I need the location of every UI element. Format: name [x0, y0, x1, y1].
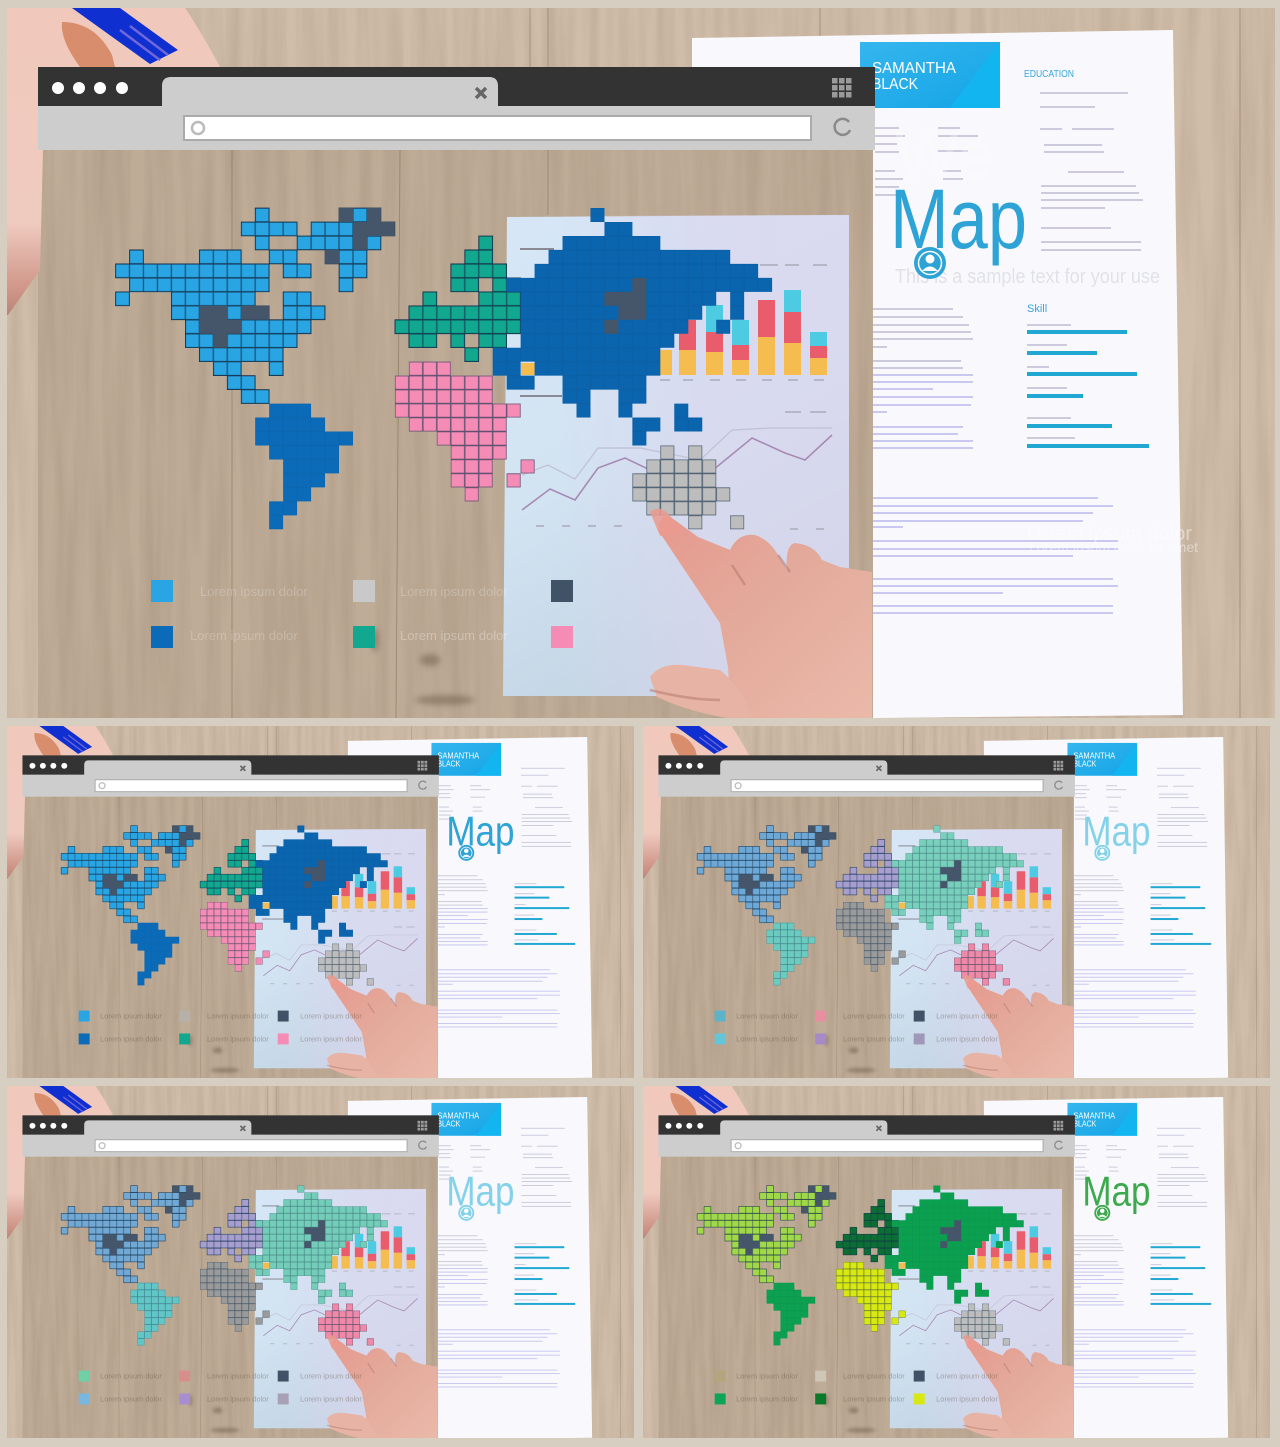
resume header text — [437, 751, 480, 768]
pixel world map — [697, 1186, 1024, 1349]
title: Map — [446, 807, 515, 854]
resume header text — [437, 1111, 480, 1128]
browser window — [22, 1115, 439, 1157]
title — [890, 118, 1160, 288]
icon: user badge — [458, 1205, 474, 1221]
legend — [715, 1011, 998, 1044]
title: Map — [890, 172, 1027, 266]
legend: Lorem ipsum dolor — [300, 1012, 362, 1021]
panel: thumbnail teal variant — [7, 1086, 634, 1438]
legend: Lorem ipsum dolor — [207, 1372, 269, 1381]
legend: Lorem ipsum dolor — [100, 1372, 162, 1381]
legend: Lorem ipsum dolor — [843, 1034, 905, 1043]
legend: Lorem ipsum dolor — [843, 1372, 905, 1381]
legend: Lorem ipsum dolor — [207, 1034, 269, 1043]
resume header text: SAMANTHA — [872, 60, 956, 77]
resume header text: SAMANTHA — [1073, 1111, 1116, 1120]
resume header text — [1073, 751, 1116, 768]
resume header text: BLACK — [437, 759, 461, 768]
browser window — [22, 755, 439, 797]
legend: Lorem ipsum dolor — [736, 1034, 798, 1043]
background photo — [7, 726, 638, 1079]
resume header text: BLACK — [437, 1119, 461, 1128]
icon: user badge — [458, 845, 474, 861]
icon: user badge — [914, 247, 946, 279]
resume header text: Skill — [1027, 303, 1047, 315]
faint caption: Lorem ipsum dolor sit amet — [1029, 539, 1198, 555]
panel: thumbnail green variant — [643, 1086, 1270, 1438]
legend: Lorem ipsum dolor — [843, 1394, 905, 1403]
browser window — [658, 755, 1075, 797]
legend: Lorem ipsum dolor — [100, 1034, 162, 1043]
legend: Lorem ipsum dolor — [207, 1012, 269, 1021]
legend: Lorem ipsum dolor — [936, 1372, 998, 1381]
resume header text: EDUCATION — [1024, 69, 1074, 80]
resume header text — [872, 60, 1074, 315]
pixel world map — [61, 826, 388, 989]
legend — [151, 580, 573, 648]
faint caption: Lorem ipsum dolor — [1026, 523, 1192, 545]
panel: thumbnail original colours — [7, 726, 634, 1078]
background photo — [643, 1086, 1274, 1439]
legend: Lorem ipsum dolor — [736, 1012, 798, 1021]
browser window — [658, 1115, 1075, 1157]
resume header text: SAMANTHA — [1073, 751, 1116, 760]
faint caption — [1026, 523, 1198, 555]
legend: Lorem ipsum dolor — [100, 1012, 162, 1021]
legend: Lorem ipsum dolor — [736, 1394, 798, 1403]
pixel world map — [61, 1186, 388, 1349]
legend: Lorem ipsum dolor — [100, 1394, 162, 1403]
resume header text — [1073, 1111, 1116, 1128]
legend: Lorem ipsum dolor — [200, 584, 308, 599]
legend: Lorem ipsum dolor — [300, 1372, 362, 1381]
legend: Lorem ipsum dolor — [936, 1034, 998, 1043]
title: Map — [1082, 807, 1151, 854]
panel: main slide — [7, 8, 1275, 718]
browser window — [38, 67, 875, 150]
icon: user badge — [1094, 845, 1110, 861]
legend — [79, 1371, 362, 1404]
background photo — [7, 1086, 638, 1439]
title: Map — [446, 1167, 515, 1214]
legend: Lorem ipsum dolor — [400, 628, 508, 643]
title: This is a sample text for your use — [895, 266, 1160, 288]
legend: Lorem ipsum dolor — [207, 1394, 269, 1403]
resume header text: BLACK — [1073, 1119, 1097, 1128]
title: Map — [1082, 1167, 1151, 1214]
resume header text: BLACK — [872, 76, 918, 93]
legend: Lorem ipsum dolor — [300, 1394, 362, 1403]
pixel world map — [697, 826, 1024, 989]
background photo — [643, 726, 1274, 1079]
legend — [715, 1371, 998, 1404]
panel: thumbnail mint and purple colours — [643, 726, 1270, 1078]
legend: Lorem ipsum dolor — [843, 1012, 905, 1021]
legend: Lorem ipsum dolor — [300, 1034, 362, 1043]
legend: Lorem ipsum dolor — [936, 1394, 998, 1403]
legend: Lorem ipsum dolor — [736, 1372, 798, 1381]
pixel world map — [116, 208, 772, 536]
legend: Lorem ipsum dolor — [400, 584, 508, 599]
legend — [79, 1011, 362, 1044]
title: We — [895, 118, 995, 192]
resume header text: SAMANTHA — [437, 1111, 480, 1120]
legend: Lorem ipsum dolor — [936, 1012, 998, 1021]
resume header text: BLACK — [1073, 759, 1097, 768]
resume header text: SAMANTHA — [437, 751, 480, 760]
icon: user badge — [1094, 1205, 1110, 1221]
background photo with papers and hands — [7, 8, 1275, 718]
legend: Lorem ipsum dolor — [190, 628, 298, 643]
